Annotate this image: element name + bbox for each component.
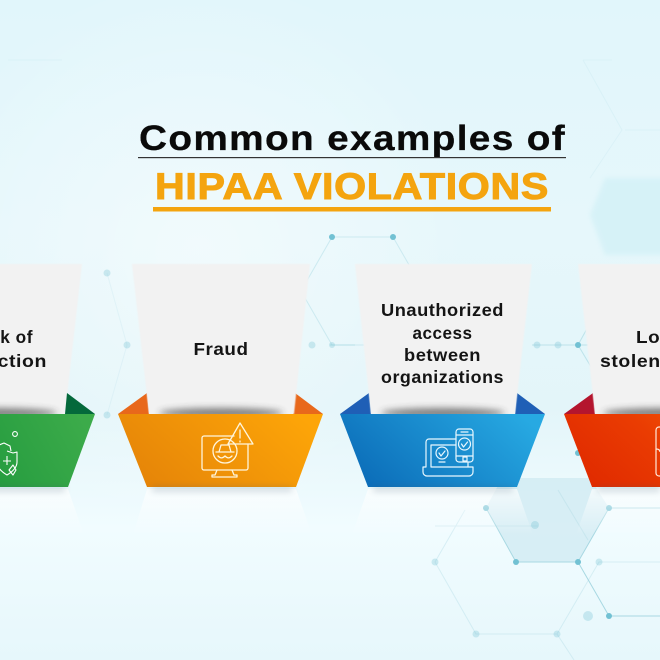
title line 2: HIPAA VIOLATIONS <box>155 166 549 207</box>
paper shadow <box>0 408 57 418</box>
card: fraud (orange) <box>118 264 323 487</box>
label: Unauthorized <box>381 300 504 320</box>
card: lost or stolen devices (red) <box>564 264 660 487</box>
label <box>0 327 47 371</box>
label: access <box>412 323 472 343</box>
reflections under folders <box>0 489 660 535</box>
folder <box>340 414 545 487</box>
card: unauthorized access (blue) <box>340 264 545 487</box>
paper <box>0 264 82 414</box>
label: between <box>404 345 481 365</box>
icon: device <box>656 427 660 476</box>
flap <box>65 393 95 414</box>
paper shadow <box>381 408 505 418</box>
label <box>600 327 660 371</box>
title <box>138 119 566 212</box>
title underline <box>153 207 551 212</box>
folder <box>564 414 660 487</box>
paper <box>578 264 660 414</box>
hexagon network: faint upper and left <box>8 60 660 415</box>
icon: laptop and phone <box>423 429 473 476</box>
title rule <box>138 157 566 158</box>
flap <box>564 393 595 414</box>
label: Fraud <box>194 339 248 359</box>
label <box>381 300 504 387</box>
paper <box>132 264 310 414</box>
hexagon network: right and bottom <box>330 305 660 660</box>
paper shadow <box>603 408 660 418</box>
paper <box>355 264 532 414</box>
icon: shield <box>0 432 17 475</box>
card: lack of protection (green) <box>0 264 95 487</box>
flaps <box>340 393 545 414</box>
folder <box>0 414 95 487</box>
title line 1: Common examples of <box>139 119 566 158</box>
flaps <box>118 393 323 414</box>
label: organizations <box>381 367 504 387</box>
folder <box>118 414 323 487</box>
icon: monitor with hacker and warning <box>202 423 253 477</box>
paper shadow <box>159 408 283 418</box>
hexagon nodes <box>104 234 612 638</box>
folder drop shadows <box>0 487 660 491</box>
